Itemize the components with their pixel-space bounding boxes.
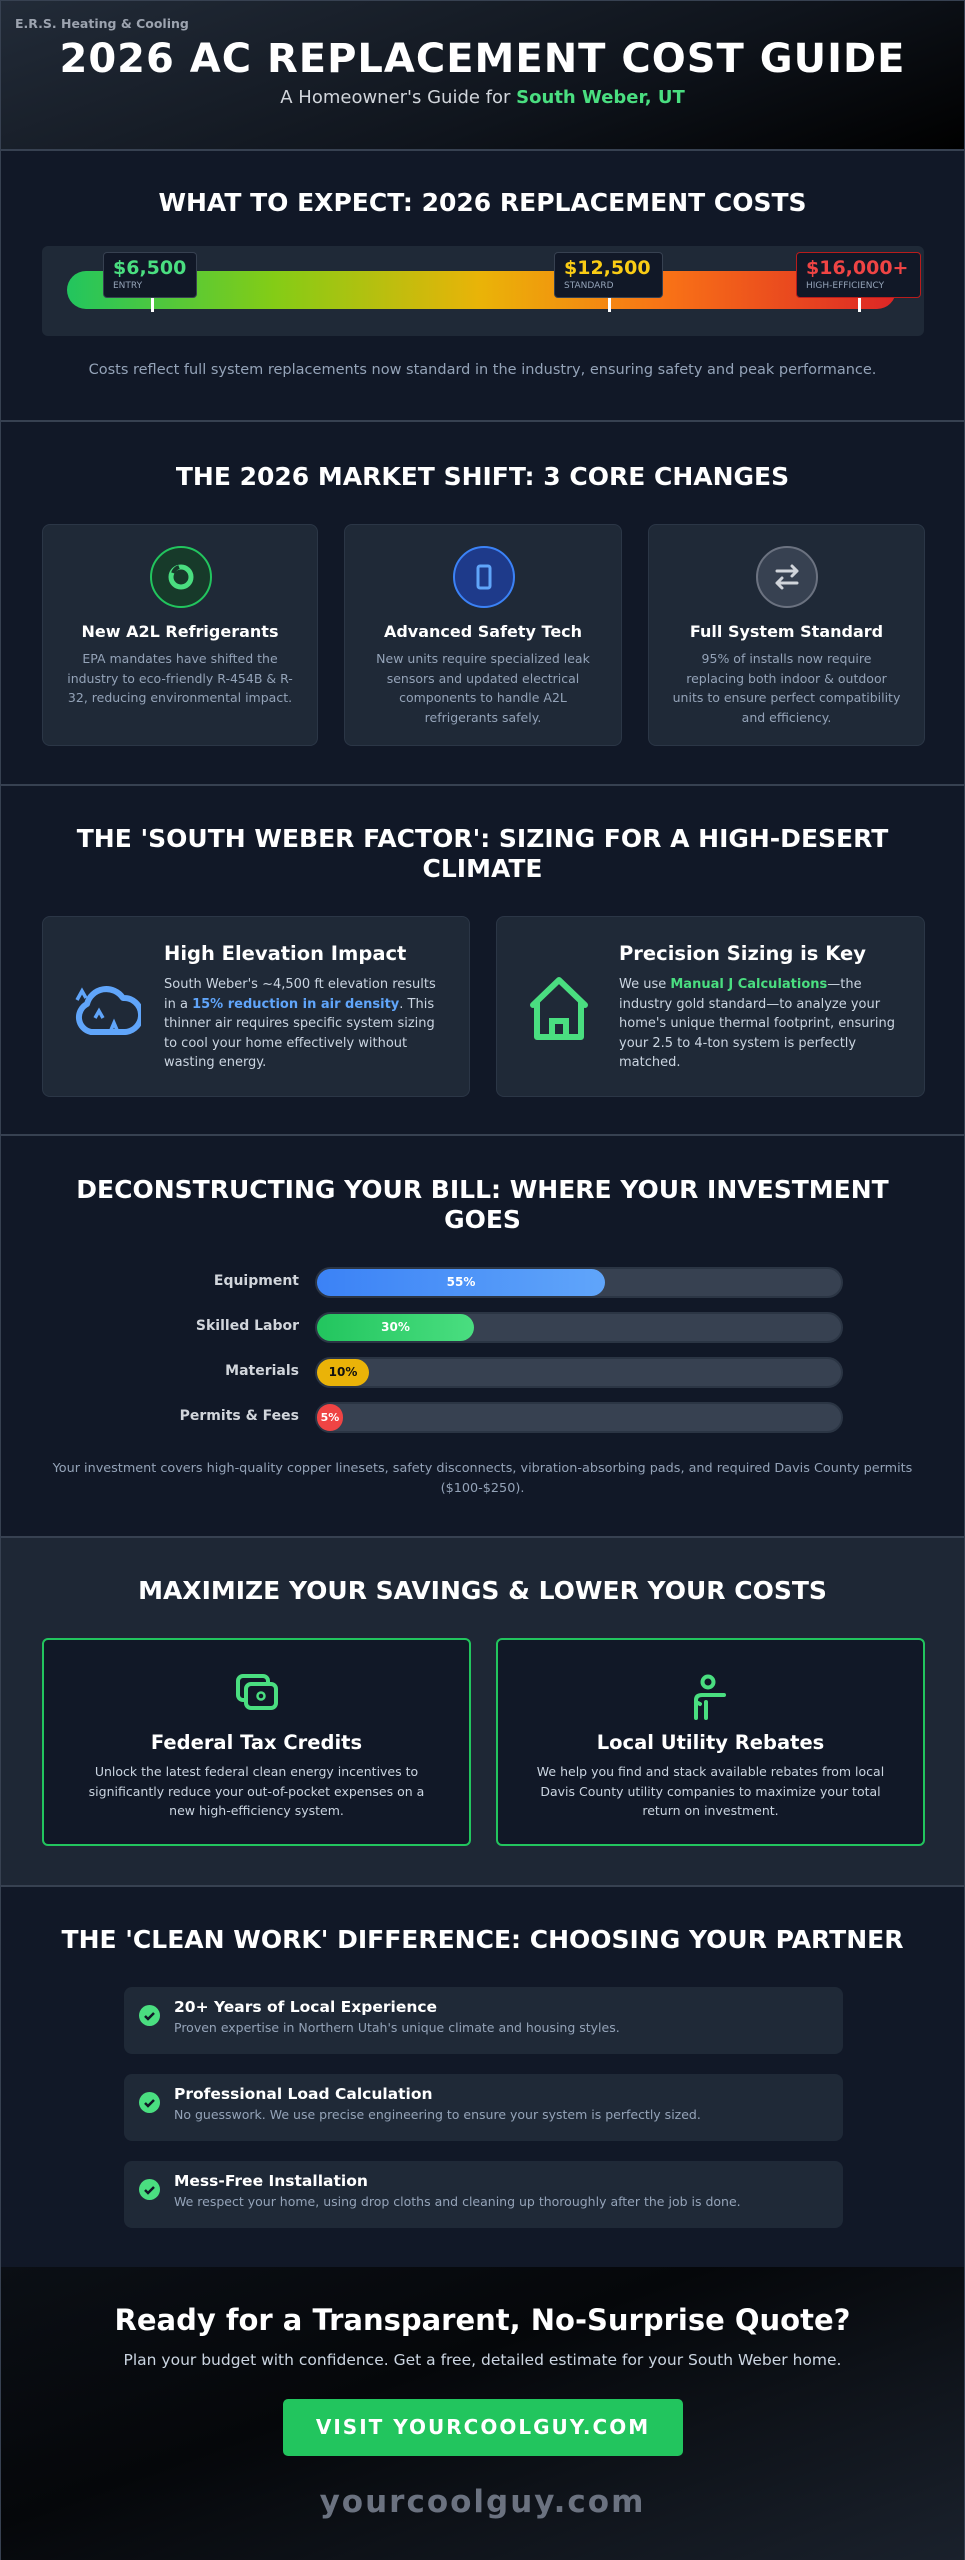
- card: precision sizing: [496, 916, 925, 1097]
- item: experience: Proven expertise in Northern Utah's unique climate and housing styles.: [174, 2020, 620, 2035]
- subtitle: A Homeowner's Guide for South Weber, UT: [280, 87, 685, 108]
- heading: DECONSTRUCTING YOUR BILL: WHERE YOUR INVESTMENT: [76, 1175, 889, 1204]
- price: high efficiency: HIGH-EFFICIENCY: [806, 281, 884, 291]
- text: New units require specialized leak sensors and updated electrical components to handle A2L refrigerants safely.: [376, 651, 590, 724]
- title: Advanced Safety Tech: [384, 622, 582, 641]
- text: and efficiency.: [742, 710, 831, 724]
- text: Unlock the latest federal clean energy incentives to significantly reduce your out-of-pocket expenses on a new high-efficiency system.: [89, 1764, 424, 1818]
- CTA text: Plan your budget with confidence. Get a free, detailed estimate for your South Weber home.: [124, 2351, 841, 2369]
- gradient bar: [67, 271, 896, 309]
- icon: person: [694, 1674, 726, 1720]
- text: 55%: [447, 1275, 475, 1289]
- icon: swap arrows: [756, 546, 818, 608]
- bar chart: Permits & Fees: [180, 1408, 299, 1424]
- heading: [76, 824, 888, 883]
- title: New A2L Refrigerants: [82, 622, 278, 641]
- text: matched.: [619, 1055, 680, 1070]
- text: 10%: [329, 1365, 357, 1379]
- section: costs: [1, 151, 964, 422]
- text: 95% of installs now require: [702, 651, 871, 666]
- CTA heading: Ready for a Transparent, No-Surprise Quote?: [115, 2303, 850, 2337]
- icon: house: [530, 977, 588, 1040]
- text: [673, 651, 900, 724]
- logo text: yourcoolguy.com: [320, 2484, 645, 2520]
- header: [1, 1, 964, 151]
- icon: cloud: [76, 986, 141, 1035]
- icon: sensor: [453, 546, 515, 608]
- text: wasting energy.: [164, 1055, 266, 1070]
- title: High Elevation Impact: [164, 942, 406, 965]
- section: south weber factor: [1, 786, 964, 1136]
- item: mess-free: We respect your home, using drop cloths and cleaning up thoroughly after the job is done.: [174, 2194, 741, 2209]
- caption: Your investment covers high-quality copper linesets, safety disconnects, vibration-absorbing pads, and required Davis County permits: [53, 1461, 912, 1476]
- bar chart: Equipment: [214, 1273, 299, 1289]
- text: We use Manual J Calculations—the: [619, 977, 862, 992]
- price: entry: ENTRY: [113, 281, 142, 291]
- text: units to ensure perfect compatibility: [673, 690, 900, 705]
- text: industry gold standard—to analyze your: [619, 996, 880, 1012]
- footer CTA: [1, 2267, 964, 2560]
- price: entry: $6,500: [113, 257, 186, 279]
- heading: GOES: [444, 1205, 521, 1234]
- text: home's unique thermal footprint, ensuring: [619, 1016, 895, 1031]
- bar chart: [180, 1273, 299, 1424]
- caption: [52, 1461, 912, 1496]
- item: load calculation: [124, 2074, 843, 2141]
- heading: THE 2026 MARKET SHIFT: 3 CORE CHANGES: [176, 462, 789, 491]
- text: 30%: [381, 1320, 410, 1334]
- heading: WHAT TO EXPECT: 2026 REPLACEMENT COSTS: [158, 188, 807, 217]
- text: 5%: [321, 1411, 339, 1424]
- text: your 2.5 to 4-ton system is perfectly: [619, 1036, 856, 1050]
- heading: THE 'SOUTH WEBER FACTOR': SIZING FOR A HIGH-DESERT: [77, 824, 888, 853]
- text: replacing both indoor & outdoor: [686, 670, 887, 686]
- item: load calculation: No guesswork. We use precise engineering to ensure your system is perfectly sized.: [174, 2107, 701, 2122]
- card: safety: [344, 524, 622, 746]
- title: Precision Sizing is Key: [619, 942, 866, 965]
- section: bill breakdown: [1, 1136, 964, 1538]
- heading: THE 'CLEAN WORK' DIFFERENCE: CHOOSING YOUR PARTNER: [62, 1925, 903, 1954]
- bar chart: Skilled Labor: [196, 1318, 299, 1334]
- title: 2026 AC REPLACEMENT COST GUIDE: [60, 36, 905, 82]
- title: Full System Standard: [690, 622, 883, 641]
- item: mess-free: Mess-Free Installation: [174, 2172, 368, 2190]
- panel: cost gauge: [42, 246, 924, 336]
- card: refrigerants: [42, 524, 318, 746]
- item: experience: 20+ Years of Local Experience: [174, 1998, 437, 2016]
- heading: MAXIMIZE YOUR SAVINGS & LOWER YOUR COSTS: [138, 1576, 827, 1605]
- text: EPA mandates have shifted the industry to eco-friendly R-454B & R-32, reducing environmental impact.: [67, 651, 293, 705]
- card: tax credits: [42, 1638, 471, 1846]
- text: to cool your home effectively without: [164, 1036, 407, 1050]
- heading: [76, 1175, 889, 1234]
- item: load calculation: Professional Load Calculation: [174, 2085, 433, 2103]
- price: high efficiency: $16,000+: [806, 257, 908, 279]
- icon: money: [236, 1674, 278, 1710]
- button: [283, 2399, 683, 2456]
- item: experience: [124, 1987, 843, 2054]
- text: [164, 977, 436, 1070]
- brand label: E.R.S. Heating & Cooling: [15, 16, 189, 31]
- icon: refrigerant: [150, 546, 212, 608]
- price: standard: [554, 252, 663, 298]
- card: rebates: [496, 1638, 925, 1846]
- card: full system: [648, 524, 925, 746]
- price: entry: [103, 252, 197, 298]
- section: savings: [1, 1538, 964, 1887]
- caption: ($100-$250).: [441, 1481, 524, 1496]
- card: elevation: [42, 916, 470, 1097]
- text: thinner air requires specific system sizing: [164, 1016, 435, 1031]
- caption: Costs reflect full system replacements now standard in the industry, ensuring safety and peak performance.: [89, 362, 876, 378]
- title: Local Utility Rebates: [597, 1731, 824, 1754]
- heading: CLIMATE: [422, 854, 542, 883]
- button: VISIT YOURCOOLGUY.COM: [316, 2415, 650, 2439]
- price: high efficiency: [796, 252, 921, 298]
- item: mess-free: [124, 2161, 843, 2228]
- price: standard: $12,500: [564, 257, 651, 279]
- title: Federal Tax Credits: [151, 1731, 362, 1754]
- section: market shift: [1, 422, 964, 786]
- bar chart: Materials: [225, 1363, 299, 1379]
- text: [619, 977, 895, 1070]
- price: standard: STANDARD: [564, 281, 614, 291]
- text: in a 15% reduction in air density. This: [164, 996, 434, 1012]
- text: South Weber's ~4,500 ft elevation results: [164, 977, 436, 992]
- text: We help you find and stack available rebates from local Davis County utility companies to maximize your total return on investment.: [537, 1764, 884, 1818]
